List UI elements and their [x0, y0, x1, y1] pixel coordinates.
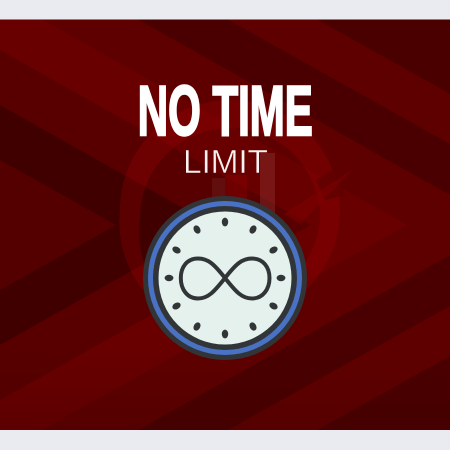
- subtitle: LIMIT: LIMIT: [183, 144, 268, 181]
- watermark bars: [212, 178, 225, 218]
- watermark ring: [119, 100, 340, 298]
- clock blue ring: [148, 201, 302, 355]
- clock outer ring: [143, 196, 307, 360]
- watermark logo: [119, 100, 352, 298]
- clock inner ring: [153, 206, 297, 350]
- clock face: [158, 212, 292, 344]
- hour ticks: [165, 218, 285, 338]
- title: NO TIME: NO TIME: [138, 71, 313, 150]
- infinity symbol: [181, 258, 270, 298]
- watermark notch: [316, 170, 345, 200]
- watermark check arrow: [284, 170, 352, 224]
- icon: infinity clock: [143, 196, 307, 360]
